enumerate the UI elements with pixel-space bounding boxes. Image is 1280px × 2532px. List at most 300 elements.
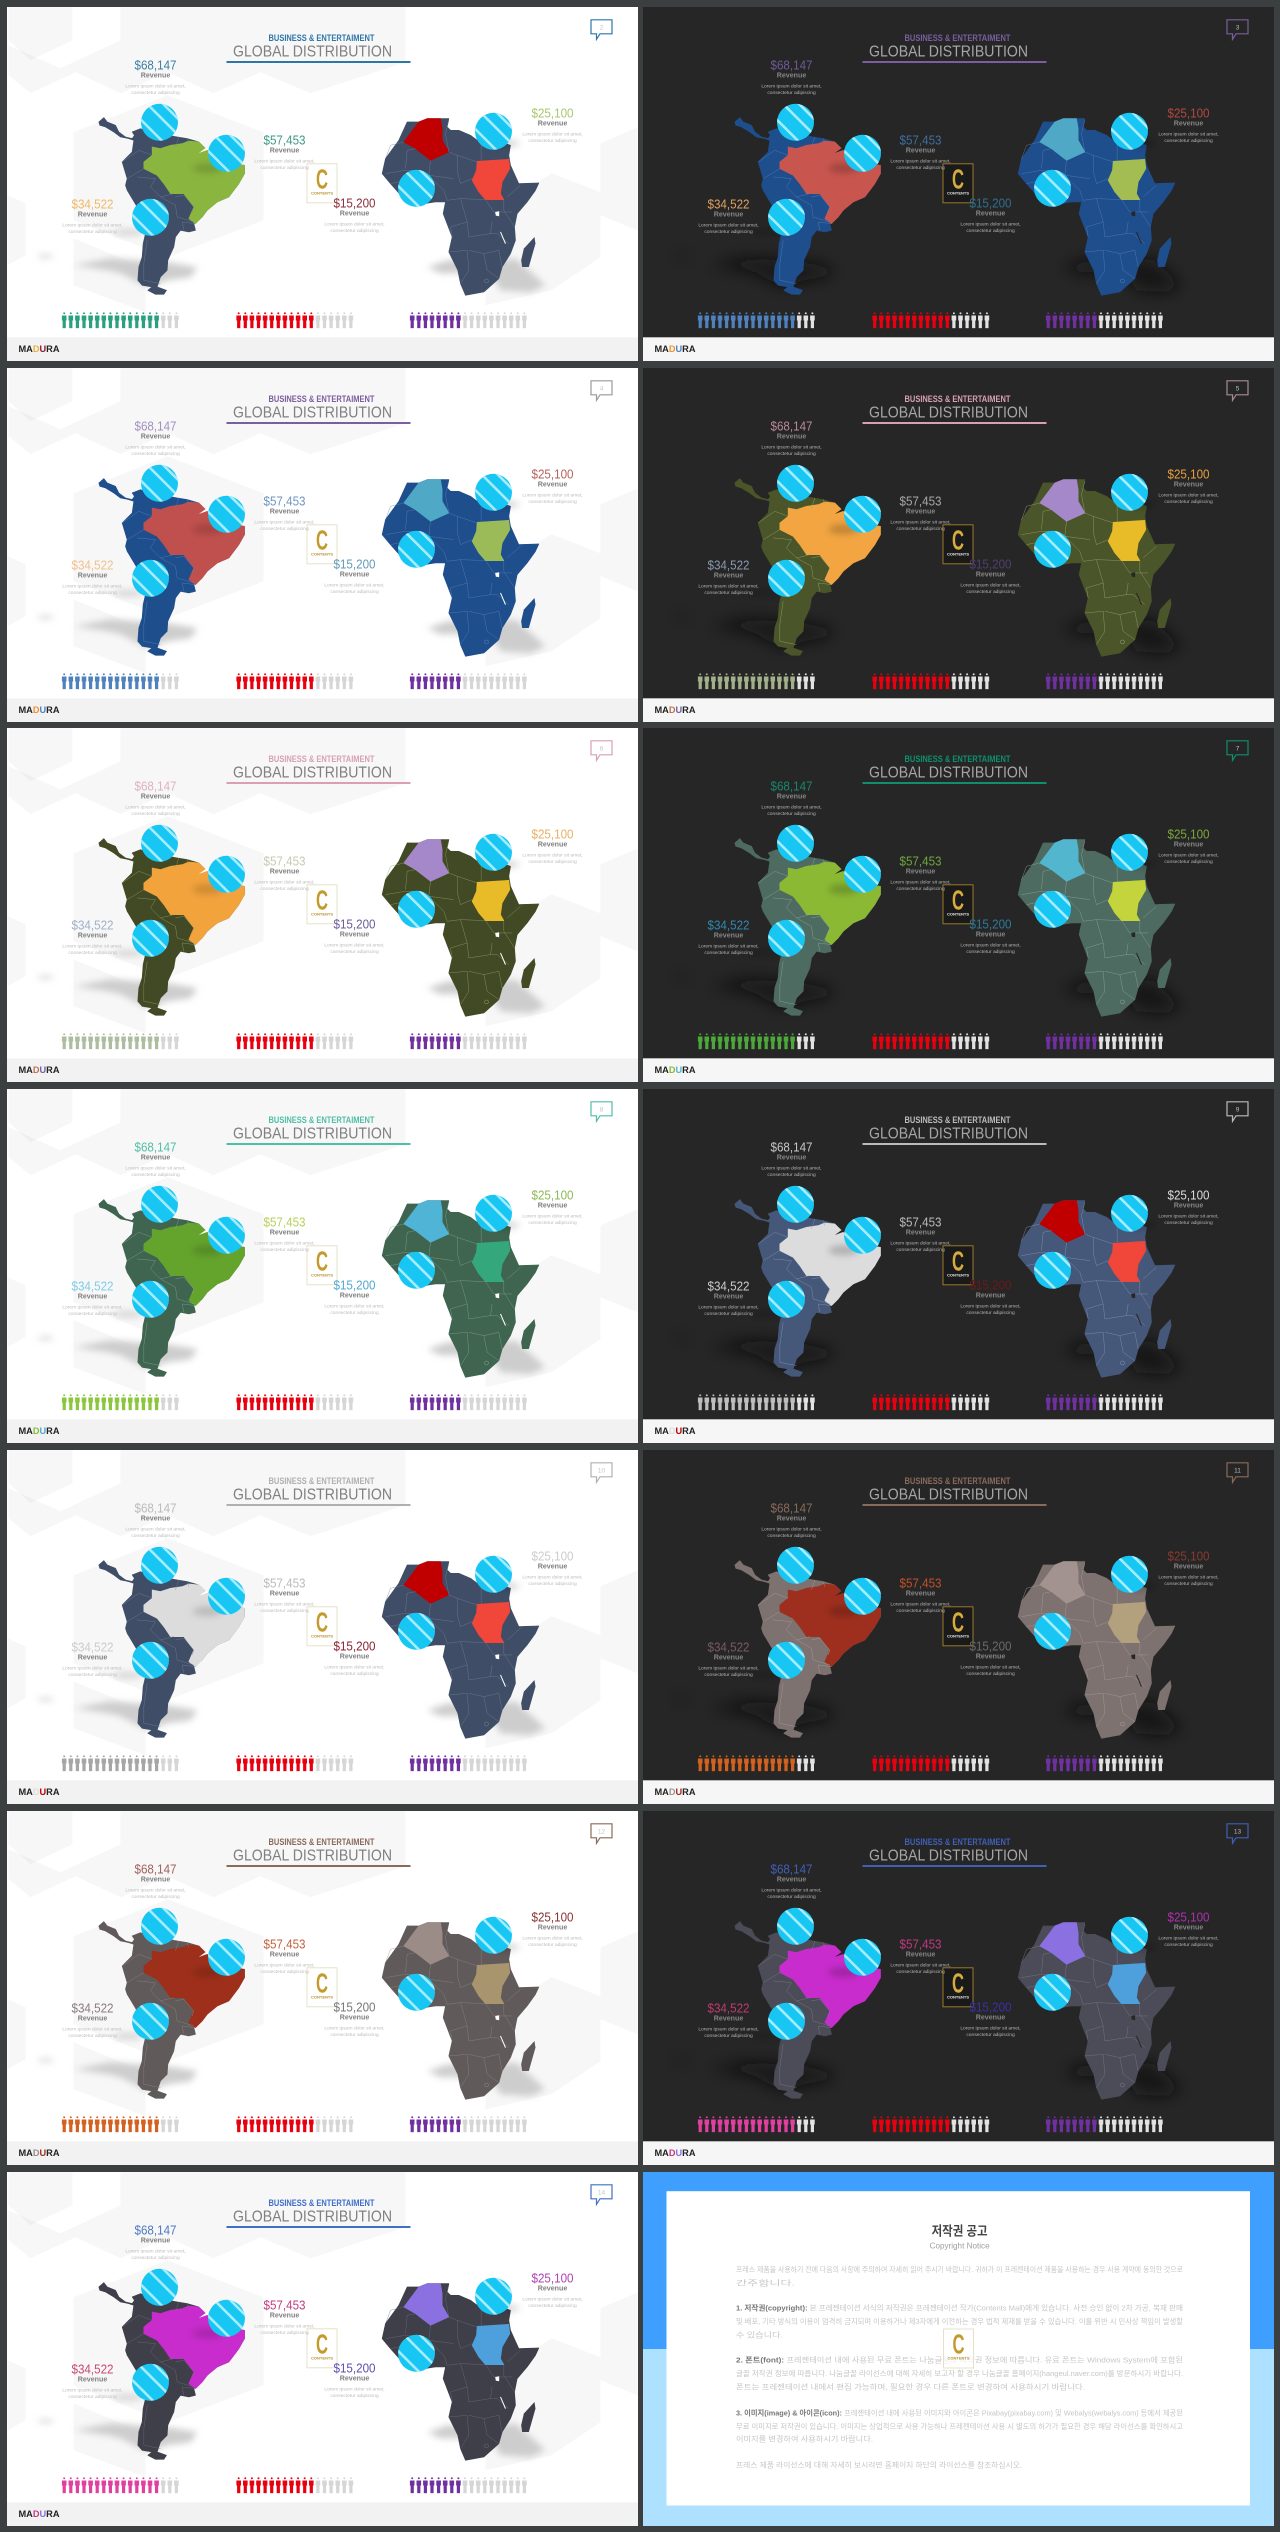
stat: 15,200: consectetur adipiscing: [330, 1310, 378, 1316]
stat: 68,147: Revenue: [777, 1875, 806, 1883]
stat: 25,100: Lorem ipsum dolor sit amet,: [1158, 1574, 1219, 1580]
map: Africa: [1018, 479, 1175, 656]
stat: 15,200: Revenue: [976, 931, 1005, 939]
stat: 68,147: Lorem ipsum dolor sit amet,: [761, 1887, 822, 1893]
stat: 25,100: consectetur adipiscing: [1164, 1581, 1213, 1587]
pictogram row 3: [409, 673, 528, 689]
stat: 15,200: Revenue: [976, 1653, 1005, 1661]
stat: 57,453: Revenue: [906, 507, 935, 515]
stat: 68,147: Revenue: [140, 1154, 170, 1162]
page badge: 12: [597, 1828, 605, 1835]
slide 10: [7, 1450, 638, 1804]
stat: 34,522: [698, 1278, 759, 1317]
stat: 25,100: consectetur adipiscing: [528, 2303, 576, 2309]
page badge: [590, 1823, 612, 1843]
stat: 15,200: consectetur adipiscing: [330, 1671, 378, 1677]
stat: 34,522: $34,522: [708, 2000, 750, 2015]
page badge: 5: [1236, 385, 1240, 392]
stat: 34,522: [698, 557, 759, 596]
heading: BUSINESS & ENTERTAIMENT: [904, 1115, 1011, 1126]
stat: 25,100: $25,100: [1168, 1548, 1210, 1563]
stat: 34,522: Revenue: [77, 1654, 107, 1662]
stat: 34,522: [62, 1278, 122, 1317]
heading: [862, 754, 1046, 784]
stat: 57,453: Lorem ipsum dolor sit amet,: [254, 1240, 314, 1246]
logo: [943, 1606, 973, 1646]
stat: 25,100: Revenue: [537, 841, 567, 849]
stat: 68,147: [125, 1861, 185, 1900]
stat: 57,453: [254, 1214, 314, 1253]
stat: 68,147: [761, 1500, 822, 1539]
logo: CONTENTS: [947, 1994, 969, 1999]
pictogram row 1: [698, 673, 816, 689]
footer: MADURA: [654, 343, 696, 353]
stat: 25,100: Revenue: [537, 1923, 567, 1931]
stat: 25,100: $25,100: [531, 1909, 573, 1924]
page badge: 14: [597, 2189, 605, 2196]
stat: 57,453: [890, 493, 951, 532]
stat: 57,453: $57,453: [900, 1214, 942, 1229]
stat: 57,453: $57,453: [263, 2297, 305, 2312]
pictogram row 3: [1046, 1394, 1164, 1410]
stat: 25,100: [522, 2270, 582, 2308]
stat: 57,453: [890, 854, 951, 892]
stat: 57,453: consectetur adipiscing: [260, 165, 308, 171]
page badge: 4: [599, 385, 603, 392]
logo: CONTENTS: [310, 1633, 333, 1638]
stat: 25,100: [522, 1187, 582, 1226]
stat: 15,200: Lorem ipsum dolor sit amet,: [324, 1664, 384, 1670]
stat: 57,453: $57,453: [900, 854, 942, 869]
stat: 25,100: Lorem ipsum dolor sit amet,: [522, 131, 582, 137]
stat: 34,522: $34,522: [708, 918, 750, 933]
footer: [6, 1059, 638, 1083]
stat: 34,522: $34,522: [71, 918, 113, 933]
stat: 68,147: [125, 1139, 185, 1178]
stat: 15,200: [324, 556, 384, 594]
stat: 34,522: $34,522: [71, 2361, 113, 2376]
heading: GLOBAL DISTRIBUTION: [232, 404, 392, 421]
heading: GLOBAL DISTRIBUTION: [232, 1486, 392, 1503]
stat: 15,200: [960, 1638, 1021, 1677]
stat: 15,200: [960, 195, 1021, 234]
stat: 57,453: Revenue: [269, 1950, 299, 1958]
heading: GLOBAL DISTRIBUTION: [869, 1847, 1028, 1864]
page badge: 13: [1234, 1828, 1241, 1835]
page badge: [590, 2184, 612, 2204]
footer: MADURA: [18, 704, 60, 714]
stat: 15,200: $15,200: [333, 2360, 375, 2375]
logo: [943, 1967, 973, 2006]
map: South America: [98, 117, 244, 294]
stat: 68,147: Revenue: [140, 1875, 170, 1883]
map: Africa: [382, 1922, 538, 2099]
footer: MADURA: [18, 1787, 60, 1797]
map: South America: [98, 1561, 244, 1737]
map: South America: [98, 1921, 244, 2098]
heading: GLOBAL DISTRIBUTION: [869, 43, 1028, 60]
heading: BUSINESS & ENTERTAIMENT: [268, 2197, 374, 2208]
stat: 15,200: Revenue: [339, 570, 369, 578]
stat: 34,522: $34,522: [71, 1278, 113, 1293]
stat: 68,147: [125, 1500, 185, 1539]
stat: 25,100: $25,100: [1168, 1187, 1210, 1202]
stat: 68,147: Revenue: [777, 1515, 806, 1523]
stat: 68,147: [761, 1139, 822, 1178]
stat: 25,100: Lorem ipsum dolor sit amet,: [522, 1935, 582, 1941]
logo: C: [952, 2328, 964, 2359]
stat: 34,522: Lorem ipsum dolor sit amet,: [698, 222, 759, 228]
stat: 15,200: Revenue: [976, 570, 1005, 578]
stat: 34,522: consectetur adipiscing: [68, 2033, 116, 2039]
footer: MADURA: [654, 1065, 696, 1075]
stat: 57,453: [254, 2297, 314, 2336]
logo: [943, 524, 973, 563]
stat: 25,100: Lorem ipsum dolor sit amet,: [1158, 1935, 1219, 1941]
heading: [862, 1115, 1046, 1145]
stat: 68,147: consectetur adipiscing: [131, 1533, 179, 1539]
stat: 25,100: Revenue: [537, 1563, 567, 1571]
stat: 57,453: Revenue: [906, 1590, 935, 1598]
stat: 25,100: [522, 1548, 582, 1587]
stat: 15,200: consectetur adipiscing: [966, 2032, 1015, 2038]
stat: 57,453: Revenue: [906, 1950, 935, 1958]
footer: [6, 698, 638, 722]
page badge: 6: [599, 746, 603, 753]
stat: 57,453: Lorem ipsum dolor sit amet,: [890, 1240, 951, 1246]
stat: 15,200: $15,200: [333, 1999, 375, 2014]
stat: 68,147: $68,147: [134, 1861, 176, 1876]
stat: 68,147: consectetur adipiscing: [767, 1533, 816, 1539]
stat: 68,147: Lorem ipsum dolor sit amet,: [761, 1165, 822, 1171]
pictogram row 3: [1046, 312, 1164, 328]
stat: 68,147: Lorem ipsum dolor sit amet,: [761, 83, 822, 89]
stat: 25,100: [522, 105, 582, 144]
stat: 15,200: [960, 556, 1021, 594]
heading: [226, 1115, 410, 1145]
map: South America: [735, 1200, 880, 1376]
footer: MADURA: [18, 1065, 60, 1075]
page badge: [590, 1102, 612, 1121]
map markers: [120, 431, 523, 624]
map: Africa: [1018, 840, 1175, 1017]
logo: CONTENTS: [947, 190, 969, 195]
stat: 34,522: Lorem ipsum dolor sit amet,: [698, 1304, 759, 1310]
logo: C: [316, 524, 328, 555]
logo: CONTENTS: [947, 1633, 969, 1638]
footer: [6, 1780, 638, 1804]
page badge: 11: [1234, 1467, 1241, 1474]
logo: C: [316, 163, 328, 194]
stat: 68,147: $68,147: [770, 1500, 812, 1515]
map markers: [120, 2235, 523, 2428]
stat: 68,147: consectetur adipiscing: [131, 90, 179, 96]
stat: 25,100: Revenue: [1174, 119, 1203, 127]
stat: 15,200: Revenue: [339, 209, 369, 217]
stat: 68,147: Revenue: [140, 71, 170, 79]
stat: 25,100: consectetur adipiscing: [528, 138, 576, 144]
logo: [306, 885, 336, 924]
slide 8: [7, 1089, 638, 1443]
stat: 25,100: [1158, 1187, 1219, 1226]
logo: [306, 524, 336, 563]
slide 12: [7, 1811, 638, 2165]
stat: 34,522: consectetur adipiscing: [68, 2394, 116, 2400]
map markers: [120, 1874, 523, 2067]
logo: [306, 1967, 336, 2006]
stat: 68,147: [761, 57, 822, 96]
stat: 34,522: Revenue: [714, 1654, 743, 1662]
stat: 15,200: consectetur adipiscing: [966, 589, 1015, 595]
copyright body text: 1. 저작권(copyright): 본 프레젠테이션 서식의 저작권은 프레젠테이션 작가(Contents Mall)에게 있습니다. 사전 승인 없이 2차 가공, 복제 판매: [736, 2302, 1183, 2312]
stat: 15,200: Revenue: [339, 931, 369, 939]
stat: 34,522: $34,522: [708, 1278, 750, 1293]
stat: 15,200: [324, 1277, 384, 1316]
stat: 15,200: consectetur adipiscing: [966, 228, 1015, 234]
pictogram row 2: [236, 1394, 354, 1410]
map: South America: [98, 839, 244, 1016]
pictogram row 2: [236, 673, 354, 689]
copyright body text: 글꼴 저작권 정보에 따릅니다. 나눔글꼴 라이선스에 대해 자세히 보고자 할 경우 나눔글꼴 홈페이지(hangeul.naver.com)를 방문하시기 바랍니다.: [736, 2368, 1183, 2378]
stat: 34,522: Revenue: [77, 2375, 107, 2383]
stat: 68,147: $68,147: [134, 779, 176, 794]
stat: 34,522: Revenue: [77, 571, 107, 579]
footer: MADURA: [18, 2147, 60, 2157]
stat: 57,453: Revenue: [269, 1590, 299, 1598]
stat: 25,100: $25,100: [531, 466, 573, 481]
stat: 15,200: consectetur adipiscing: [330, 2393, 378, 2399]
stat: 34,522: consectetur adipiscing: [68, 1311, 116, 1317]
heading: BUSINESS & ENTERTAIMENT: [268, 1115, 374, 1126]
logo: C: [952, 1606, 964, 1637]
logo: [944, 2328, 974, 2368]
logo: C: [952, 885, 964, 916]
stat: 15,200: $15,200: [970, 195, 1012, 210]
stat: 57,453: [254, 1936, 314, 1975]
stat: 25,100: consectetur adipiscing: [1164, 1942, 1213, 1948]
stat: 57,453: Lorem ipsum dolor sit amet,: [254, 519, 314, 525]
copyright body text: 간주합니다.: [736, 2277, 795, 2287]
stat: 68,147: Lorem ipsum dolor sit amet,: [761, 444, 822, 450]
stat: 57,453: $57,453: [263, 1214, 305, 1229]
stat: 34,522: Revenue: [77, 932, 107, 940]
pictogram row 1: [698, 1034, 816, 1050]
stat: 15,200: [324, 1999, 384, 2038]
stat: 25,100: Lorem ipsum dolor sit amet,: [522, 2296, 582, 2302]
stat: 68,147: $68,147: [770, 57, 812, 72]
copyright body text: 폰트는 프레젠테이션 내에서 편집 가능하며, 필요한 경우 다른 폰트로 변경하여 사용하시기 바랍니다.: [736, 2381, 1085, 2391]
map: South America: [98, 478, 244, 655]
stat: 34,522: [698, 1639, 759, 1678]
stat: 57,453: consectetur adipiscing: [896, 1608, 945, 1614]
stat: 68,147: Lorem ipsum dolor sit amet,: [125, 83, 185, 89]
pictogram row 2: [872, 1394, 991, 1410]
stat: 25,100: consectetur adipiscing: [528, 859, 576, 865]
map: South America: [735, 1921, 880, 2098]
slide 2: [7, 7, 638, 361]
stat: 34,522: Lorem ipsum dolor sit amet,: [62, 944, 122, 950]
stat: 34,522: Lorem ipsum dolor sit amet,: [698, 583, 759, 589]
logo: C: [316, 1245, 328, 1276]
stat: 15,200: $15,200: [333, 917, 375, 932]
page badge: 2: [599, 24, 603, 31]
stat: 68,147: $68,147: [134, 2222, 176, 2237]
stat: 34,522: consectetur adipiscing: [68, 950, 116, 956]
stat: 68,147: $68,147: [134, 1139, 176, 1154]
stat: 68,147: consectetur adipiscing: [767, 1894, 816, 1900]
stat: 34,522: Revenue: [77, 210, 107, 218]
stat: 25,100: consectetur adipiscing: [528, 1581, 576, 1587]
stat: 68,147: Revenue: [777, 71, 806, 79]
stat: 25,100: $25,100: [531, 2270, 573, 2285]
stat: 25,100: consectetur adipiscing: [1164, 1220, 1213, 1226]
heading: GLOBAL DISTRIBUTION: [232, 43, 392, 60]
page badge: 9: [1236, 1106, 1240, 1113]
heading: GLOBAL DISTRIBUTION: [869, 404, 1028, 421]
footer: MADURA: [654, 704, 696, 714]
pictogram row 3: [409, 1034, 528, 1050]
stat: 68,147: Lorem ipsum dolor sit amet,: [125, 805, 185, 811]
logo: CONTENTS: [948, 2355, 970, 2360]
copyright body text: 및 배포, 기타 방식의 이용이 엄격히 금지되며 이용하거나 제3자에게 이전하는 경우 법적 제재를 받을 수 있습니다. 이를 위반 시 민사상 책임이 발생할: [736, 2316, 1183, 2326]
stat: 68,147: $68,147: [770, 418, 812, 433]
stat: 25,100: consectetur adipiscing: [1164, 138, 1213, 144]
stat: 15,200: Revenue: [976, 2013, 1005, 2021]
stat: 25,100: Lorem ipsum dolor sit amet,: [522, 492, 582, 498]
stat: 34,522: $34,522: [71, 1639, 113, 1654]
pictogram row 1: [698, 2116, 816, 2132]
footer: [643, 1059, 1274, 1083]
heading: [226, 1836, 410, 1867]
copyright title: 저작권 공고: [932, 2223, 988, 2238]
stat: 57,453: Revenue: [906, 1229, 935, 1237]
stat: 15,200: Revenue: [339, 2013, 369, 2021]
stat: 34,522: consectetur adipiscing: [68, 590, 116, 596]
pictogram row 3: [1046, 1755, 1164, 1771]
stat: 25,100: $25,100: [531, 827, 573, 842]
stat: 68,147: Lorem ipsum dolor sit amet,: [125, 2248, 185, 2254]
stat: 15,200: consectetur adipiscing: [330, 2032, 378, 2038]
stat: 34,522: Revenue: [714, 571, 743, 579]
map: South America: [98, 1200, 244, 1376]
heading: BUSINESS & ENTERTAIMENT: [904, 1836, 1011, 1847]
stat: 34,522: $34,522: [708, 557, 750, 572]
stat: 15,200: Revenue: [976, 209, 1005, 217]
stat: 57,453: Lorem ipsum dolor sit amet,: [890, 1962, 951, 1968]
logo: C: [316, 2328, 328, 2359]
heading: BUSINESS & ENTERTAIMENT: [268, 1836, 374, 1847]
stat: 25,100: Revenue: [1174, 1563, 1203, 1571]
heading: GLOBAL DISTRIBUTION: [232, 2208, 392, 2225]
stat: 34,522: Revenue: [77, 1293, 107, 1301]
logo: C: [316, 1606, 328, 1637]
logo: [943, 163, 973, 202]
map markers: [756, 1874, 1160, 2067]
stat: 25,100: Lorem ipsum dolor sit amet,: [1158, 853, 1219, 859]
logo: C: [316, 885, 328, 916]
stat: 68,147: $68,147: [770, 779, 812, 794]
stat: 15,200: Lorem ipsum dolor sit amet,: [960, 2025, 1021, 2031]
logo: C: [952, 163, 964, 194]
stat: 57,453: consectetur adipiscing: [260, 886, 308, 892]
stat: 68,147: [125, 2222, 185, 2260]
page badge: [590, 1463, 612, 1482]
stat: 34,522: [698, 2000, 759, 2039]
stat: 25,100: Lorem ipsum dolor sit amet,: [1158, 492, 1219, 498]
map markers: [120, 1152, 523, 1345]
pictogram row 2: [872, 1755, 991, 1771]
logo: [943, 885, 973, 924]
stat: 34,522: Revenue: [714, 210, 743, 218]
slide 7: [643, 728, 1274, 1082]
stat: 15,200: Revenue: [339, 1292, 369, 1300]
pictogram row 1: [61, 1034, 180, 1050]
stat: 68,147: Revenue: [140, 432, 170, 440]
footer: MADURA: [654, 1787, 696, 1797]
logo: [943, 1245, 973, 1285]
map: South America: [98, 2282, 244, 2459]
pictogram row 2: [872, 312, 991, 328]
stat: 15,200: [960, 1277, 1021, 1316]
stat: 68,147: Lorem ipsum dolor sit amet,: [125, 444, 185, 450]
pictogram row 3: [1046, 673, 1164, 689]
stat: 57,453: [890, 132, 951, 171]
stat: 15,200: Lorem ipsum dolor sit amet,: [960, 1664, 1021, 1670]
stat: 25,100: [522, 827, 582, 865]
stat: 57,453: $57,453: [263, 493, 305, 508]
stat: 25,100: Lorem ipsum dolor sit amet,: [522, 1213, 582, 1219]
map: Africa: [382, 1562, 538, 1738]
stat: 57,453: [254, 493, 314, 532]
pictogram row 1: [61, 312, 180, 328]
slide 11: [643, 1450, 1274, 1804]
slide 14: [7, 2172, 638, 2526]
stat: 15,200: consectetur adipiscing: [330, 228, 378, 234]
logo: CONTENTS: [947, 551, 969, 556]
logo: CONTENTS: [310, 190, 333, 195]
stat: 57,453: Revenue: [269, 146, 299, 154]
stat: 34,522: Lorem ipsum dolor sit amet,: [698, 1665, 759, 1671]
pictogram row 1: [61, 1394, 180, 1410]
stat: 34,522: [62, 557, 122, 596]
stat: 68,147: Lorem ipsum dolor sit amet,: [761, 1526, 822, 1532]
stat: 68,147: Lorem ipsum dolor sit amet,: [125, 1165, 185, 1171]
logo: CONTENTS: [310, 1994, 333, 1999]
stat: 57,453: $57,453: [900, 132, 942, 147]
stat: 57,453: Lorem ipsum dolor sit amet,: [890, 1601, 951, 1607]
footer: [643, 698, 1274, 722]
stat: 15,200: Lorem ipsum dolor sit amet,: [960, 1303, 1021, 1309]
stat: 34,522: [62, 196, 122, 235]
heading: [862, 32, 1046, 63]
stat: 57,453: [890, 1936, 951, 1975]
logo: C: [952, 1245, 964, 1276]
logo: CONTENTS: [947, 912, 969, 917]
stat: 57,453: [254, 1575, 314, 1614]
stat: 34,522: Lorem ipsum dolor sit amet,: [62, 583, 122, 589]
map: Africa: [382, 479, 538, 656]
heading: [862, 393, 1046, 424]
pictogram row 3: [409, 312, 528, 328]
stat: 68,147: consectetur adipiscing: [767, 451, 816, 457]
heading: GLOBAL DISTRIBUTION: [869, 765, 1028, 782]
pictogram row 1: [698, 1394, 816, 1410]
stat: 15,200: Lorem ipsum dolor sit amet,: [324, 221, 384, 227]
stat: 57,453: consectetur adipiscing: [896, 1247, 945, 1253]
stat: 57,453: [254, 854, 314, 892]
stat: 57,453: $57,453: [263, 1575, 305, 1590]
slide 4: [7, 368, 638, 722]
